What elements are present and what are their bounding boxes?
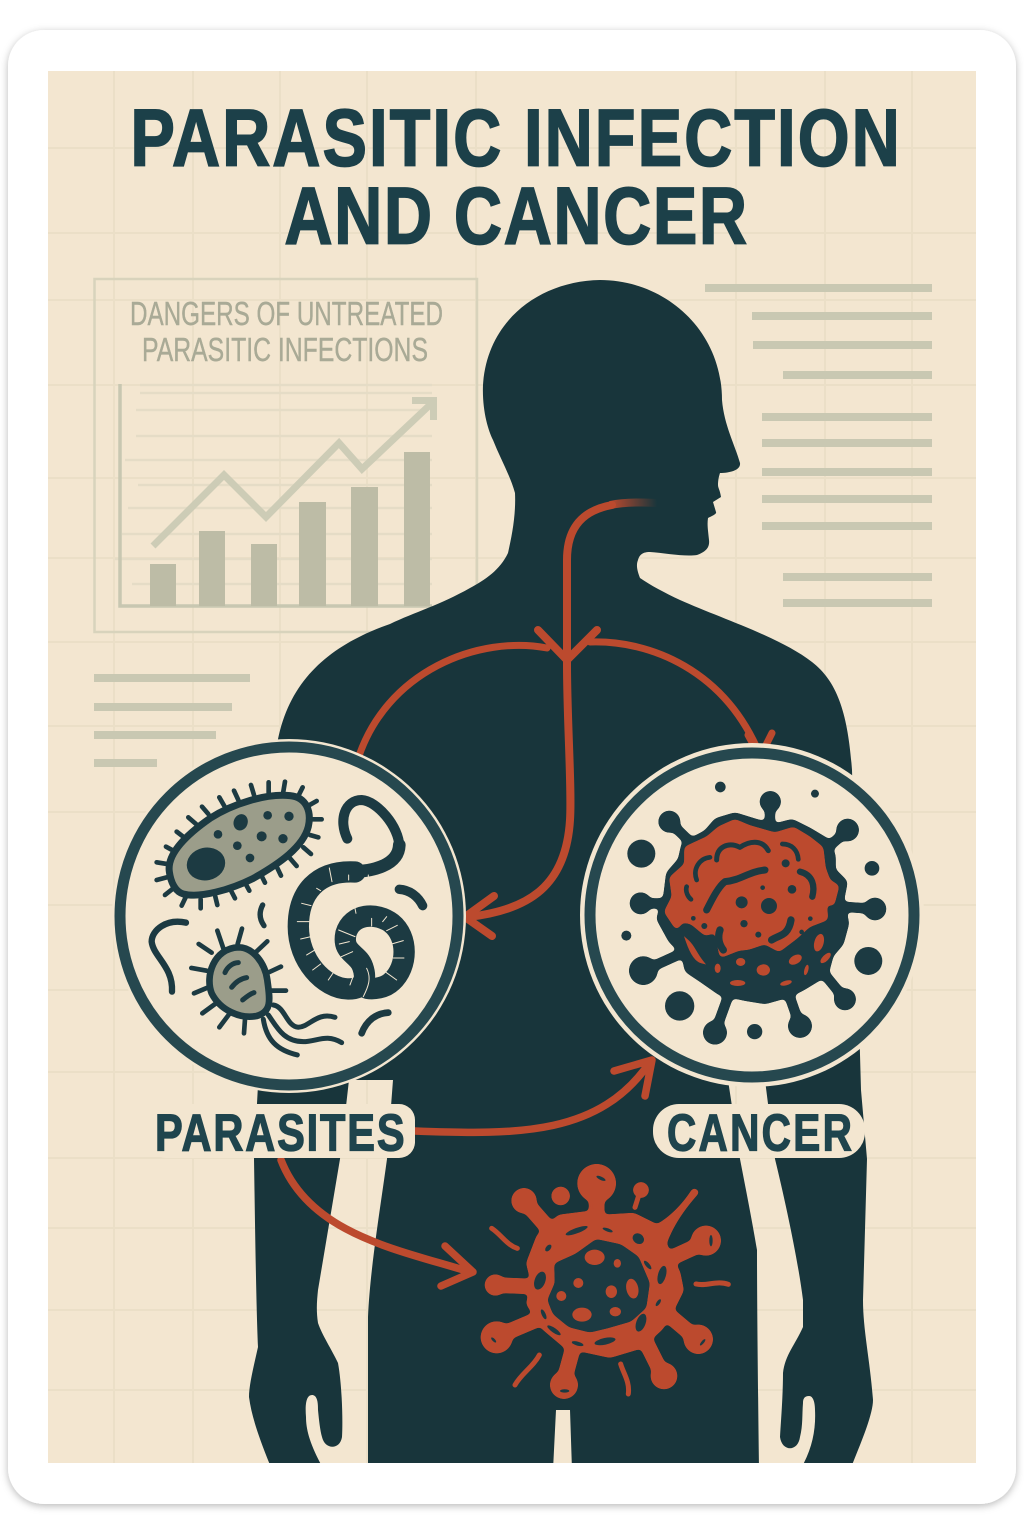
label: cancer: CANCER — [667, 1104, 852, 1162]
chart heading — [130, 295, 443, 368]
human silhouette — [249, 280, 873, 1470]
arrow: parasites to tumour — [281, 1160, 473, 1286]
icon: floating particles — [621, 782, 882, 1039]
arrow: descending trunk to parasites — [468, 505, 612, 917]
bars — [150, 452, 430, 606]
faded text lines right — [705, 284, 932, 607]
label: lower arrows — [281, 1060, 652, 1286]
icon: red virus in abdomen — [481, 1164, 728, 1399]
panel: parasites circle — [112, 739, 466, 1093]
arrow: junction chevrons — [538, 630, 597, 660]
faded text lines left — [94, 674, 250, 767]
icon: cancer cell body and spikes — [629, 791, 886, 1045]
trend arrow — [153, 397, 437, 546]
virus nuclei and pores — [490, 1175, 713, 1393]
virus wisps — [492, 1192, 728, 1394]
icon: small microbe — [191, 929, 342, 1055]
panel: faded chart — [94, 279, 477, 632]
title: PARASITIC INFECTION — [130, 92, 900, 183]
virus spokes and ring — [481, 1164, 721, 1399]
panel: cancer circle — [580, 743, 924, 1087]
arrow: throat fade — [610, 502, 657, 505]
chart axes — [120, 384, 432, 606]
icon: loose squiggles — [152, 889, 423, 1033]
label: parasites: PARASITES — [155, 1103, 405, 1162]
icon: red tumour mass — [667, 822, 837, 955]
icon: tumour folds and pits — [686, 842, 813, 950]
icon: oval bacterium — [157, 782, 322, 908]
virus core — [550, 1242, 647, 1330]
arrow: left circle arrowhead — [465, 896, 494, 936]
title — [130, 92, 900, 261]
arrow: right circle arrowhead — [748, 733, 772, 757]
title: AND CANCER — [284, 170, 747, 261]
arrow: branch to right circle — [590, 642, 760, 755]
chart heading: PARASITIC INFECTIONS — [142, 331, 428, 368]
red circulation arrows — [357, 502, 772, 936]
chart heading: DANGERS OF UNTREATED — [130, 295, 443, 332]
icon: segmented worm — [297, 800, 404, 997]
arrow: parasites to cancer — [415, 1060, 652, 1132]
arrow: branch to left circle — [357, 645, 547, 762]
